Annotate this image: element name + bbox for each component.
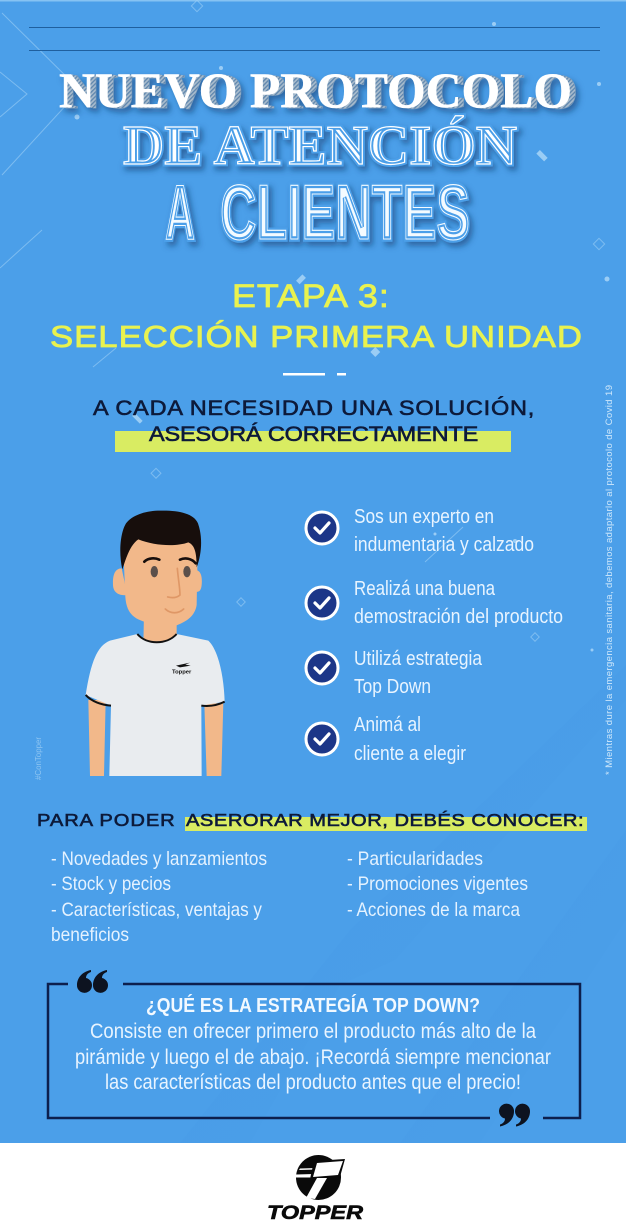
list: left column: - Novedades y lanzamientos — [51, 848, 267, 870]
t-shirt — [86, 634, 225, 776]
item 1: indumentaria y calzado — [354, 534, 534, 556]
callout text: pirámide y luego el de abajo. ¡Recordá siempre mencionar — [75, 1045, 551, 1069]
title line: nuevo protocolo: NUEVO PROTOCOLO — [63, 62, 576, 118]
icon: opening quote — [77, 970, 108, 993]
footer — [0, 1143, 626, 1229]
stage heading: ETAPA 3: — [232, 279, 389, 315]
box frame — [48, 984, 580, 1118]
section heading — [37, 811, 587, 831]
callout text: las características del producto antes que el precio! — [105, 1070, 521, 1094]
item 2: Realizá una buena — [354, 578, 496, 600]
title line: a clientes — [165, 168, 470, 256]
callout heading: ¿QUÉ ES LA ESTRATEGÍA TOP DOWN? — [146, 994, 480, 1017]
logo: Topper — [267, 1155, 363, 1224]
stage heading — [50, 279, 582, 354]
eyes and brows — [144, 558, 196, 577]
item 4 — [306, 714, 466, 765]
title line: a clientes: A — [165, 168, 195, 256]
item 3: Utilizá estrategia — [354, 648, 483, 670]
item 3: Top Down — [354, 676, 431, 698]
top rules — [29, 28, 600, 50]
title line: nuevo protocolo: NUEVO PROTOCOLO — [61, 62, 574, 118]
title line: nuevo protocolo: NUEVO PROTOCOLO — [65, 63, 578, 119]
subtitle text — [93, 396, 534, 446]
list: left column: beneficios — [51, 924, 129, 946]
hair — [120, 511, 201, 569]
stage heading: SELECCIÓN PRIMERA UNIDAD — [50, 319, 582, 354]
shirt trims — [86, 634, 225, 706]
callout text — [75, 1019, 551, 1094]
yellow highlight — [115, 431, 511, 452]
arms — [88, 700, 223, 776]
subtitle — [93, 396, 534, 452]
title line: nuevo protocolo: NUEVO PROTOCOLO — [59, 62, 572, 118]
side note: * Mientras dure la emergencia sanitaria, debemos adaptarlo al protocolo de Covid 19 — [604, 385, 615, 775]
title line: a clientes: CLIENTES — [220, 168, 470, 256]
shirt logo — [172, 663, 192, 676]
heading text: ASERORAR MEJOR, DEBÉS CONOCER: — [186, 811, 584, 831]
illustration: salesperson — [86, 511, 225, 776]
item 2: demostración del producto — [354, 606, 563, 628]
item 1 — [306, 506, 534, 556]
item 3 — [306, 648, 483, 698]
item 4: cliente a elegir — [354, 743, 466, 765]
list: left column: - Stock y pecios — [51, 873, 171, 895]
callout box — [48, 970, 580, 1126]
highlight — [185, 817, 587, 831]
face — [123, 533, 198, 627]
list: right column: - Promociones vigentes — [347, 873, 528, 895]
item 1: Sos un experto en — [354, 506, 494, 528]
title line: de atencion: DE ATENCIÓN — [123, 115, 517, 177]
callout text: Consiste en ofrecer primero el producto más alto de la — [90, 1019, 536, 1043]
title line: a clientes: A — [165, 168, 195, 256]
subtitle text: A CADA NECESIDAD UNA SOLUCIÓN, — [93, 396, 534, 420]
nose and mouth — [165, 568, 184, 613]
neck — [143, 613, 177, 647]
title line: a clientes: CLIENTES — [220, 168, 470, 256]
item 2 — [306, 578, 563, 628]
icon: closing quote — [499, 1104, 530, 1126]
checklist — [306, 506, 563, 765]
list: left column: - Características, ventajas y — [51, 899, 262, 921]
heading text: PARA PODER — [37, 811, 175, 831]
ears — [113, 568, 202, 595]
list: right column — [347, 848, 528, 921]
divider dashes — [283, 373, 346, 376]
shirt logo: Topper — [172, 670, 192, 676]
list: right column: - Acciones de la marca — [347, 899, 520, 921]
logo: Topper: TOPPER — [267, 1203, 363, 1224]
list: left column — [51, 848, 267, 946]
title — [59, 62, 578, 256]
list: right column: - Particularidades — [347, 848, 483, 870]
title line: de atencion: DE ATENCIÓN — [123, 115, 517, 177]
hashtag: #ConTopper — [34, 737, 43, 780]
item 4: Animá al — [354, 714, 421, 736]
subtitle text: ASESORÁ CORRECTAMENTE — [149, 422, 478, 446]
